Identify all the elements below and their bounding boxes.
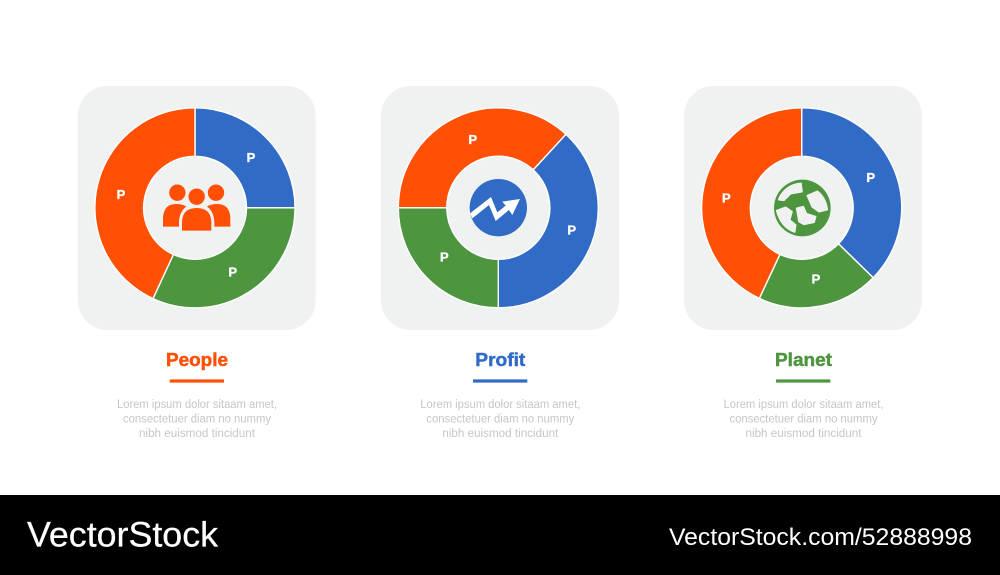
donut chart: planet	[702, 108, 902, 308]
footer logo text: VectorStock	[27, 516, 219, 554]
panel: profit	[381, 86, 619, 440]
heading: profit: Profit	[475, 350, 525, 370]
underline: people	[170, 379, 224, 383]
text block: people: nibh euismod tincidunt	[139, 428, 256, 440]
text block: people	[117, 399, 277, 440]
donut chart: people	[95, 108, 295, 308]
label: people orange segment: P	[117, 187, 126, 202]
icon: growth arrow	[470, 179, 527, 236]
text block: planet	[724, 399, 884, 440]
label: profit blue segment: P	[567, 223, 576, 238]
text block: planet: consectetuer diam no nummy	[730, 414, 878, 426]
text block: people: consectetuer diam no nummy	[123, 414, 271, 426]
underline: profit	[473, 379, 527, 383]
panel background: people	[78, 86, 316, 330]
underline: planet	[776, 379, 830, 383]
label: profit green segment: P	[440, 249, 449, 264]
donut chart: profit	[398, 108, 598, 308]
text block: people: Lorem ipsum dolor sitaam amet,	[117, 399, 277, 411]
label: people green segment: P	[228, 264, 237, 279]
footer image id: VectorStock.com/52888998	[669, 524, 972, 551]
text block: profit: Lorem ipsum dolor sitaam amet,	[420, 399, 580, 411]
label: planet orange segment: P	[722, 191, 731, 206]
icon: globe	[774, 180, 831, 236]
text block: profit: consectetuer diam no nummy	[426, 414, 575, 426]
panel: people	[78, 86, 316, 440]
text block: planet: nibh euismod tincidunt	[746, 428, 862, 440]
label: profit orange segment: P	[468, 132, 477, 147]
label: planet blue segment: P	[866, 170, 875, 185]
panel: planet	[684, 86, 922, 440]
panel background: planet	[684, 86, 922, 330]
text block: profit: nibh euismod tincidunt	[442, 428, 559, 440]
footer banner	[0, 495, 1000, 575]
icon: group of people	[163, 184, 230, 231]
label: people blue segment: P	[247, 150, 256, 165]
heading: planet: Planet	[775, 350, 832, 370]
label: planet green segment: P	[812, 271, 821, 286]
panel background: profit	[381, 86, 619, 330]
text block: planet: Lorem ipsum dolor sitaam amet,	[724, 399, 884, 411]
heading: people: People	[166, 350, 228, 370]
text block: profit	[420, 399, 580, 440]
